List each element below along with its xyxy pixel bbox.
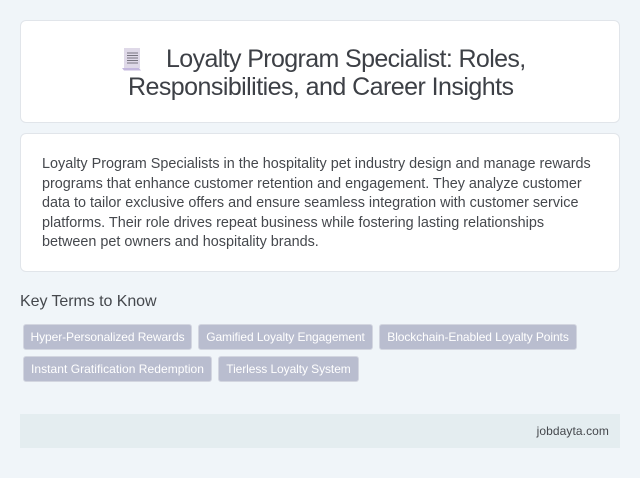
title text <box>128 45 526 101</box>
tag: instant gratification redemption <box>23 356 212 382</box>
description text: between pet owners and hospitality brands. <box>42 234 319 250</box>
tag: tierless loyalty system <box>218 356 359 382</box>
footer source: jobdayta.com <box>537 424 609 438</box>
title text: Responsibilities, and Career Insights <box>128 73 513 101</box>
term tags <box>23 324 577 382</box>
tag: blockchain-enabled loyalty points: Blockchain-Enabled Loyalty Points <box>387 330 569 344</box>
tag: gamified loyalty engagement <box>198 324 373 350</box>
heading: key terms: Key Terms to Know <box>20 293 157 310</box>
description text: programs that enhance customer retention and engagement. They analyze customer <box>42 176 582 192</box>
footer bar <box>20 414 620 448</box>
tag: instant gratification redemption: Instant Gratification Redemption <box>31 362 204 376</box>
title text: Loyalty Program Specialist: Roles, <box>166 45 526 73</box>
tag: gamified loyalty engagement: Gamified Loyalty Engagement <box>206 330 365 344</box>
tag: blockchain-enabled loyalty points <box>379 324 577 350</box>
description text: platforms. Their role drives repeat business while fostering lasting relationships <box>42 215 544 231</box>
description text: data to tailor exclusive offers and ensure seamless integration with customer service <box>42 195 578 211</box>
title card <box>20 20 620 123</box>
description text: Loyalty Program Specialists in the hospitality pet industry design and manage rewards <box>42 156 591 172</box>
tag: hyper-personalized rewards: Hyper-Personalized Rewards <box>30 330 184 344</box>
icon: document receipt <box>122 48 141 70</box>
description card <box>20 133 620 272</box>
tag: hyper-personalized rewards <box>23 324 192 350</box>
tag: tierless loyalty system: Tierless Loyalty System <box>226 362 351 376</box>
description text <box>42 156 591 250</box>
